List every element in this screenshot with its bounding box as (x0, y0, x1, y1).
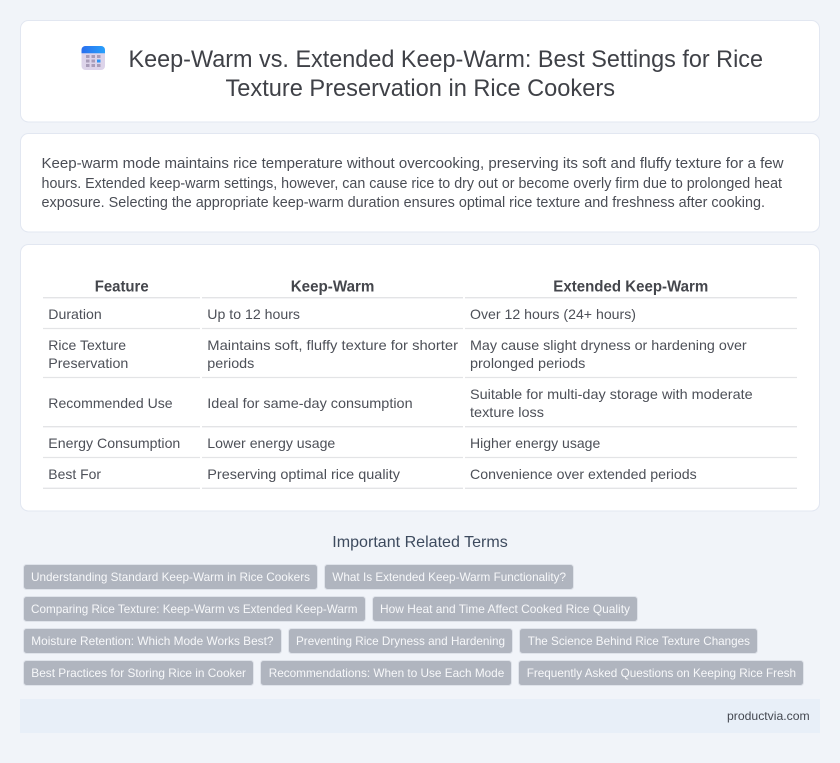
tag (324, 564, 574, 590)
table header: Feature (95, 278, 149, 296)
table header (95, 278, 708, 296)
related term tags (24, 564, 804, 686)
tag: Frequently Asked Questions on Keeping Rice Fresh (527, 666, 796, 680)
tag (372, 596, 638, 622)
tag (260, 660, 512, 686)
row: duration: Over 12 hours (24+ hours) (470, 306, 636, 322)
row: duration: Duration (48, 306, 102, 322)
table header: Extended Keep-Warm (553, 278, 708, 296)
tag: Understanding Standard Keep-Warm in Rice Cookers (31, 570, 310, 584)
row: energy consumption (48, 435, 601, 451)
title: Keep-Warm vs. Extended Keep-Warm: Best Settings for Rice (128, 46, 763, 73)
tag (520, 628, 758, 654)
tag: Preventing Rice Dryness and Hardening (296, 634, 505, 648)
tag: Comparing Rice Texture: Keep-Warm vs Extended Keep-Warm (31, 602, 358, 616)
row: recommended use: Recommended Use (48, 395, 173, 411)
title: Texture Preservation in Rice Cookers (226, 75, 615, 102)
row: best for: Preserving optimal rice quality (207, 466, 400, 482)
tag: Moisture Retention: Which Mode Works Best? (31, 634, 274, 648)
row: recommended use: Suitable for multi-day storage with moderate (470, 386, 753, 402)
row: best for (48, 466, 697, 482)
row: recommended use: Ideal for same-day consumption (207, 395, 413, 411)
tag (518, 660, 804, 686)
tag (24, 596, 366, 622)
heading: important related terms: Important Related Terms (332, 534, 508, 551)
tag (24, 564, 318, 590)
footer (20, 699, 820, 733)
row: duration (48, 306, 636, 322)
row: recommended use (48, 386, 753, 420)
panel: comparison table (20, 244, 820, 511)
row: energy consumption: Lower energy usage (207, 435, 336, 451)
tag: Best Practices for Storing Rice in Cooker (31, 666, 246, 680)
tag (288, 628, 512, 654)
intro paragraph (42, 156, 784, 211)
row: rice texture preservation: Maintains soft, fluffy texture for shorter (207, 337, 458, 353)
table header: Keep-Warm (291, 278, 374, 296)
tag (24, 628, 282, 654)
row: rice texture preservation: prolonged periods (470, 355, 585, 371)
tag: Recommendations: When to Use Each Mode (269, 666, 505, 680)
row: rice texture preservation: Rice Texture (48, 337, 126, 353)
row: duration: Up to 12 hours (207, 306, 300, 322)
icon: calendar (82, 46, 105, 70)
row: energy consumption: Energy Consumption (48, 435, 180, 451)
panel: title card (20, 20, 820, 122)
footer source: productvia.com (727, 709, 810, 723)
tag: What Is Extended Keep-Warm Functionality? (332, 570, 566, 584)
row: rice texture preservation: Preservation (48, 355, 128, 371)
title (128, 46, 763, 102)
intro paragraph: Keep-warm mode maintains rice temperature without overcooking, preserving its soft and fluffy texture for a few (42, 156, 784, 172)
row: energy consumption: Higher energy usage (470, 435, 601, 451)
tag (24, 660, 254, 686)
panel: introduction text (20, 134, 820, 232)
intro paragraph: exposure. Selecting the appropriate keep-warm duration ensures optimal rice texture and freshness after cooking. (42, 195, 765, 211)
row: best for: Convenience over extended periods (470, 466, 697, 482)
row: rice texture preservation: May cause slight dryness or hardening over (470, 337, 747, 353)
row: rice texture preservation: periods (207, 355, 254, 371)
row: best for: Best For (48, 466, 101, 482)
intro paragraph: hours. Extended keep-warm settings, however, can cause rice to dry out or become overly firm due to prolonged heat (42, 176, 782, 192)
row: rice texture preservation (48, 337, 747, 371)
row: recommended use: texture loss (470, 404, 544, 420)
tag: The Science Behind Rice Texture Changes (528, 634, 750, 648)
tag: How Heat and Time Affect Cooked Rice Quality (380, 602, 630, 616)
